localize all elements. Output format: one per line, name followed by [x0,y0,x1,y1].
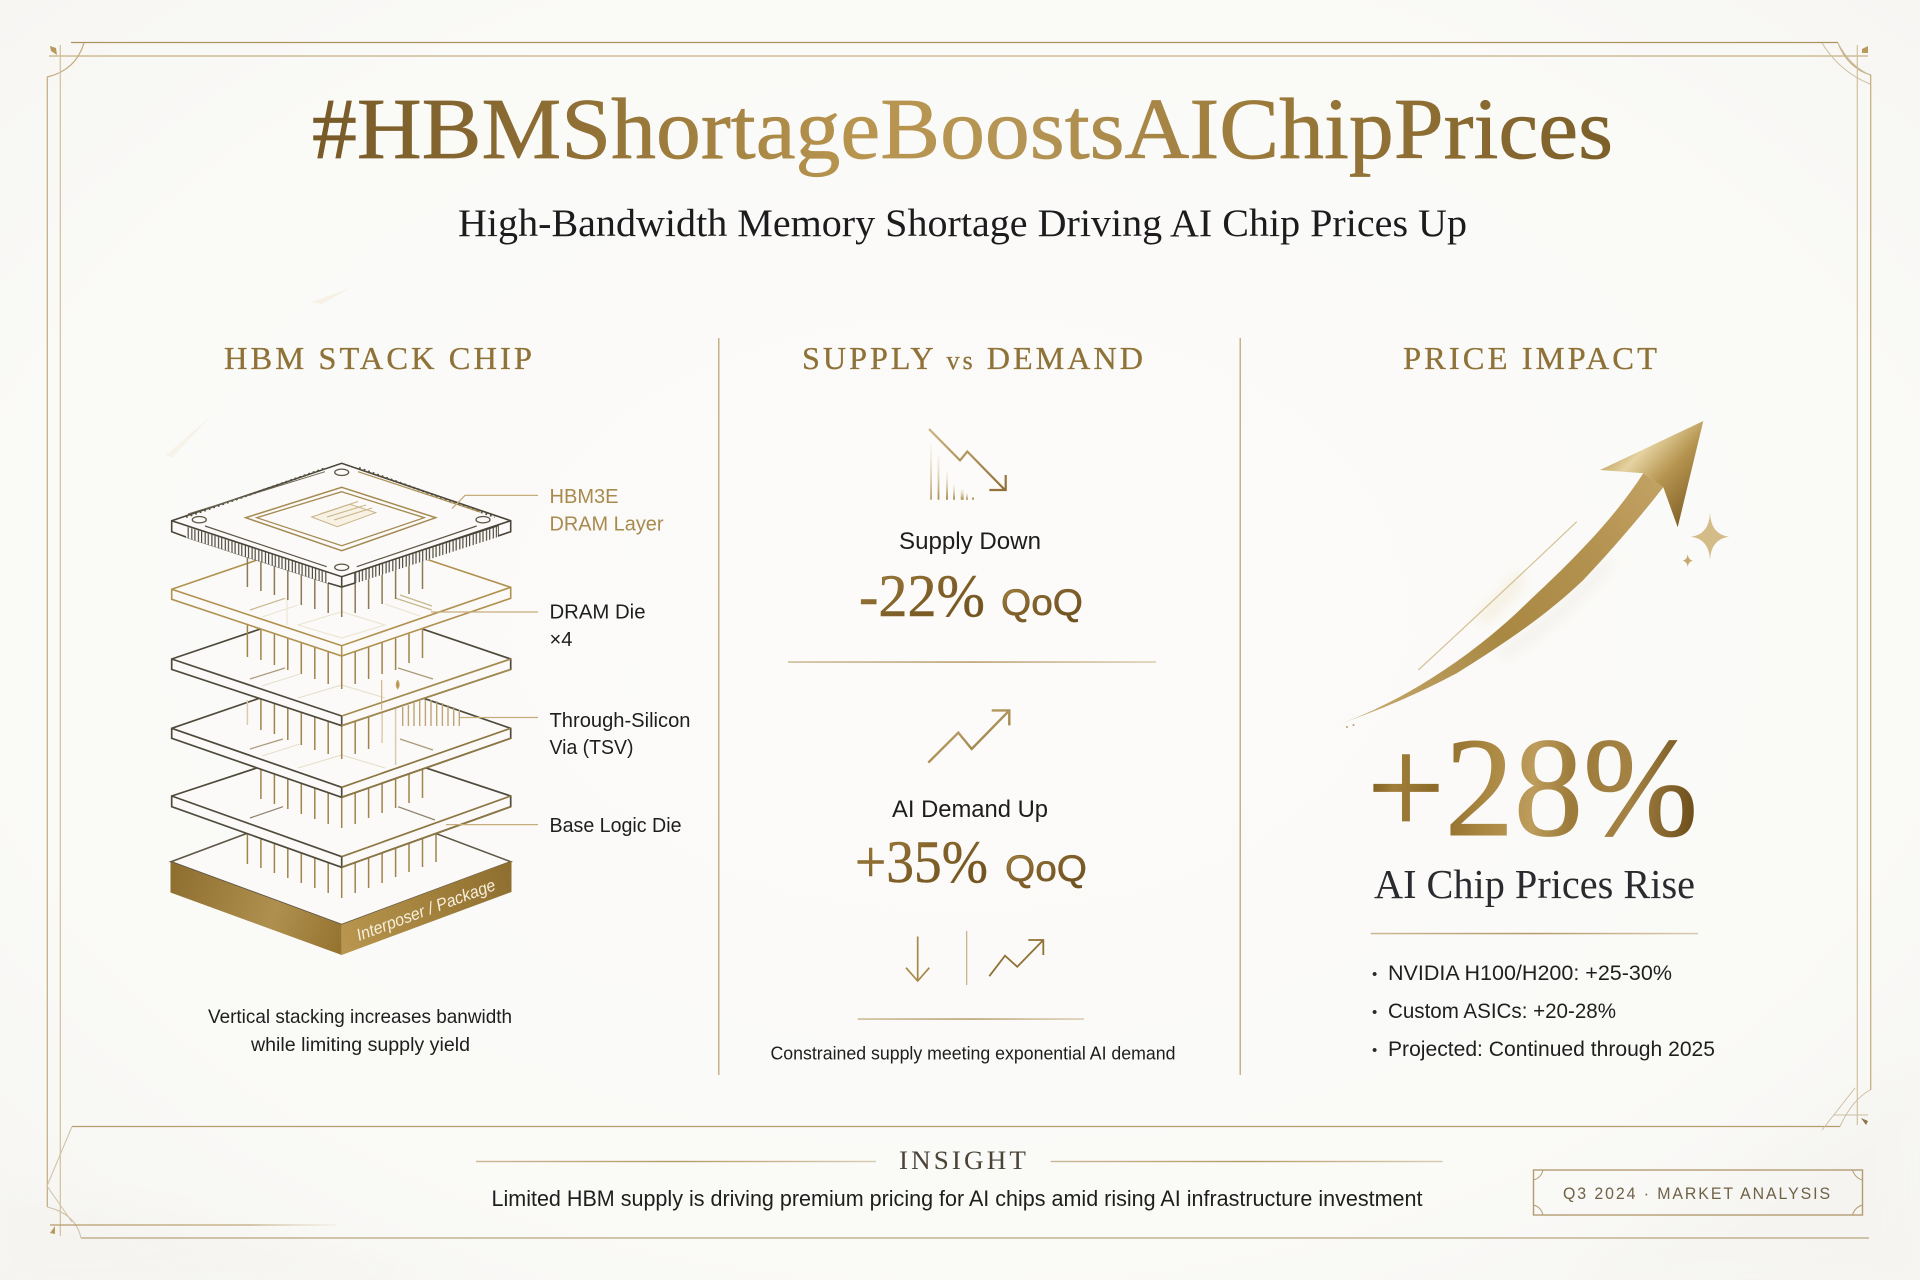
DRAM die plate one [172,531,511,656]
label: through-silicon via: Through-Silicon [550,710,690,732]
panel: insight footer [476,1146,1442,1211]
interposer package base [170,798,512,955]
label: through-silicon via: Via (TSV) [550,737,634,759]
caption: vertical stacking [208,1006,512,1056]
stat: plus 28 percent: +28% [1367,708,1698,866]
heading: supply vs demand: SUPPLY vs DEMAND [802,340,1146,376]
bullet list: price impacts: • [1372,1042,1377,1059]
logic die plate [172,740,511,867]
label: HBM3E DRAM layer [452,486,664,536]
divider rule [858,1018,1084,1020]
divider rule [788,661,1156,663]
divider rule [1371,933,1698,934]
label: supply down: Supply Down [899,528,1041,555]
panel: supply vs demand [770,340,1176,1064]
heading: insight: INSIGHT [899,1146,1029,1175]
caption: vertical stacking: while limiting supply yield [250,1034,470,1056]
title: #HBMShortageBoostsAIChipPrices [312,80,1613,177]
bullet list: price impacts: • [1372,966,1377,983]
stat: minus 22 percent QoQ: QoQ [1001,582,1083,623]
caption: constrained supply: Constrained supply meeting exponential AI demand [770,1044,1176,1064]
label: DRAM die x4 [431,602,646,651]
heading: price impact: PRICE IMPACT [1403,340,1660,376]
icon: supply falling chart [929,429,1006,500]
DRAM die plate three [172,670,511,797]
stat: minus 22 percent QoQ [859,563,1083,629]
label: base logic die: Base Logic Die [550,815,682,837]
label: AI demand up: AI Demand Up [892,796,1048,823]
diagram: exploded HBM stack [170,463,512,955]
insight rules [476,1161,1442,1162]
DRAM die plate two [172,602,511,726]
stat: plus 35 percent QoQ: +35% [855,829,988,895]
panel: HBM stack chip [170,340,690,1056]
TSV highlight [382,680,399,710]
caption: vertical stacking: Vertical stacking increases banwidth [208,1006,512,1028]
label: HBM3E DRAM layer: HBM3E [550,486,618,508]
label: through-silicon via [460,710,690,759]
through-silicon via hatch [403,700,459,726]
subtitle: High-Bandwidth Memory Shortage Driving AI Chip Prices Up [458,202,1467,245]
stat: plus 35 percent QoQ [855,829,1087,895]
label: DRAM die x4: ×4 [550,629,572,651]
badge: Q3 2024 market analysis: Q3 2024 · MARKET ANALYSIS [1563,1185,1832,1203]
label: DRAM die x4: DRAM Die [550,602,646,624]
label: HBM3E DRAM layer: DRAM Layer [550,514,664,536]
bullet list: price impacts: • [1372,1004,1377,1021]
interposer package base: Interposer / Package [354,875,498,945]
panel: price impact [1337,340,1729,1061]
icon: down arrow and up trend [906,931,1043,985]
icon: rising gold arrow [1337,421,1729,728]
stat: minus 22 percent QoQ: -22% [859,563,985,629]
stat: plus 35 percent QoQ: QoQ [1005,848,1087,889]
bullet list: price impacts [1372,961,1715,1061]
bullet list: price impacts: Projected: Continued through 2025 [1388,1037,1715,1061]
insight text: Limited HBM supply is driving premium pricing for AI chips amid rising AI infrastructure investment [492,1186,1422,1211]
bullet list: price impacts: NVIDIA H100/H200: +25-30% [1388,961,1672,985]
heading: HBM stack chip: HBM STACK CHIP [224,340,535,376]
column dividers [718,338,1241,1075]
label: AI chip prices rise: AI Chip Prices Rise [1374,861,1695,907]
badge: Q3 2024 market analysis [1534,1170,1862,1215]
icon: demand rising chart [928,710,1009,763]
HBM3E top chip [172,463,511,587]
bullet list: price impacts: Custom ASICs: +20-28% [1388,999,1616,1023]
